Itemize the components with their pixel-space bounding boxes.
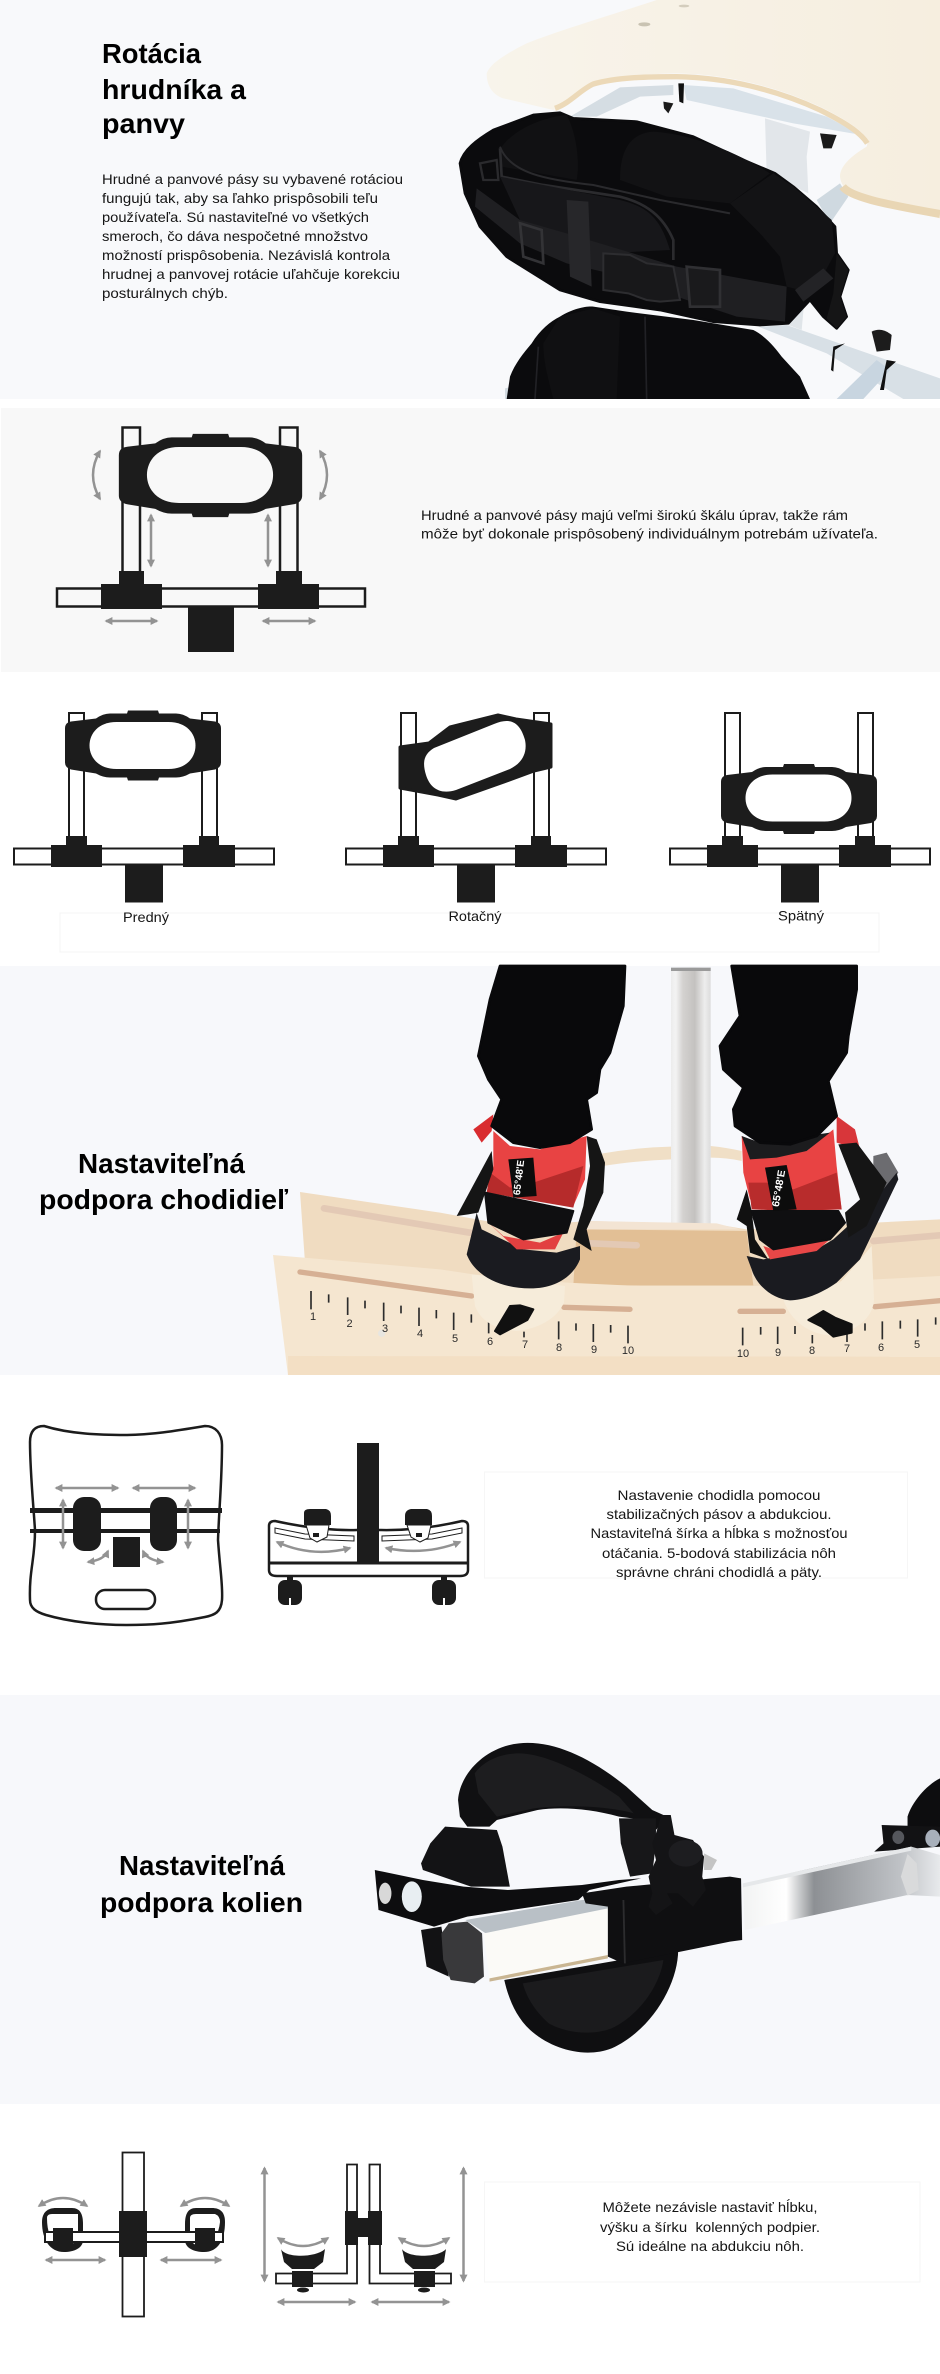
text block: foot adjustment note — [484, 1472, 908, 1580]
text block: description: používateľa. Sú nastaviteľné vo všetkých — [102, 209, 369, 225]
panel: rotation of chest and pelvis — [0, 0, 940, 399]
diagram: knee support top view — [39, 2152, 229, 2316]
panel: belt positions — [14, 710, 930, 952]
scale numbers: 5 — [452, 1333, 458, 1345]
heading: podpora chodidieľ — [39, 1184, 288, 1215]
scale numbers: 6 — [487, 1336, 493, 1348]
panel: adjustable foot support — [0, 966, 940, 1375]
front board — [273, 1255, 940, 1375]
scale numbers: 8 — [809, 1345, 815, 1357]
text block: description: posturálnych chýb. — [102, 285, 228, 301]
scale numbers: 10 — [737, 1348, 749, 1360]
foot plate wood — [472, 1274, 565, 1331]
shoe tags: 65°48'E — [770, 1169, 788, 1208]
heading: Nastaviteľná — [78, 1148, 245, 1179]
text block: adjustment note: Hrudné a panvové pásy majú veľmi širokú škálu úprav, takže rám — [421, 507, 848, 523]
icon: range arrows — [264, 2168, 464, 2302]
scale numbers: 1 — [310, 1311, 316, 1323]
text block: description: možností prispôsobenia. Nezávislá kontrola — [102, 247, 390, 263]
scale numbers: 5 — [914, 1339, 920, 1351]
text block: adjustment note: môže byť dokonale prispôsobený individuálnym potrebám užívateľa. — [421, 526, 878, 542]
heading: Nastaviteľná — [119, 1850, 285, 1881]
photo: knee pad on steel bar — [375, 1743, 940, 2053]
scale numbers: 8 — [556, 1342, 562, 1354]
diagram: footplate front view — [269, 1443, 468, 1605]
heading — [102, 38, 246, 139]
icon: knee arrows — [39, 2198, 229, 2260]
heading: podpora kolien — [100, 1887, 303, 1918]
diagram: knee support front view — [264, 2164, 464, 2302]
lower belt — [507, 307, 810, 399]
shoe tags — [512, 1159, 788, 1208]
icon: rotation arrows — [93, 451, 327, 621]
label: front: Predný — [123, 909, 169, 925]
label: back: Spätný — [778, 908, 824, 924]
heading: Rotácia — [102, 38, 201, 69]
diagram: front position — [14, 710, 274, 902]
diagram: back position — [670, 713, 930, 902]
label: rotated: Rotačný — [448, 908, 502, 924]
scale numbers: 6 — [878, 1342, 884, 1354]
icon: adjustment arrows — [56, 1488, 195, 1562]
text block: knee adjustment note: Sú ideálne na abdukciu nôh. — [616, 2238, 804, 2254]
scale numbers: 9 — [591, 1344, 597, 1356]
photo: chest and pelvis belts with tray — [460, 0, 940, 399]
panel: foot adjustment diagrams — [30, 1426, 908, 1625]
text block: knee adjustment note — [484, 2182, 920, 2282]
shoe tags: 65°48'E — [512, 1159, 527, 1196]
photo: feet on wooden footplate — [273, 966, 940, 1375]
left shoe — [473, 1114, 493, 1143]
heading: hrudníka a — [102, 74, 246, 105]
text block: knee adjustment note: Môžete nezávisle nastaviť hĺbku, — [602, 2198, 818, 2215]
text block: description: Hrudné a panvové pásy su vybavené rotáciou — [102, 171, 403, 187]
text block: description — [102, 171, 403, 301]
scale numbers: 9 — [775, 1347, 781, 1359]
text block: adjustment note — [421, 507, 878, 542]
text block: foot adjustment note: Nastavenie chodidla pomocou — [618, 1487, 820, 1503]
scale numbers: 2 — [346, 1318, 353, 1330]
scale numbers: 3 — [382, 1323, 388, 1335]
text block: description: smeroch, čo dáva nespočetné množstvo — [102, 228, 368, 244]
heading — [39, 1148, 288, 1215]
text block: foot adjustment note: otáčania. 5-bodová stabilizácia nôh — [602, 1545, 836, 1561]
back board — [300, 1192, 940, 1286]
text block: description: fungujú tak, aby sa ľahko prispôsobili teľu — [102, 190, 378, 206]
scale numbers: 10 — [622, 1345, 634, 1357]
panel: adjustable knee support — [0, 1695, 940, 2104]
panel: knee adjustment diagrams — [39, 2152, 920, 2316]
diagram: footplate top view — [30, 1426, 222, 1625]
faint caption box — [60, 913, 879, 952]
legs — [478, 966, 625, 1148]
text block: description: hrudnej a panvovej rotácie uľahčuje korekciu — [102, 266, 400, 282]
diagram: belt adjustment frame — [57, 428, 365, 652]
text block: foot adjustment note: Nastaviteľná šírka a hĺbka s možnosťou — [590, 1524, 848, 1541]
text block: foot adjustment note: správne chráni chodidlá a päty. — [616, 1564, 822, 1580]
scale numbers: 7 — [844, 1343, 850, 1355]
text block: foot adjustment note: stabilizačných pásov a abdukciou. — [606, 1506, 832, 1522]
diagram: rotated position — [346, 713, 606, 902]
scale numbers — [310, 1311, 920, 1360]
panel: belt adjustment range — [1, 408, 940, 672]
heading — [100, 1850, 303, 1918]
scale numbers: 4 — [417, 1328, 423, 1340]
text block: knee adjustment note: výšku a šírku kolenných podpier. — [600, 2219, 820, 2235]
heading: panvy — [102, 108, 185, 139]
right shoe — [837, 1116, 860, 1149]
scale numbers: 7 — [522, 1339, 528, 1351]
upper belt — [460, 113, 848, 328]
icon: swing arrows — [277, 1542, 460, 1552]
